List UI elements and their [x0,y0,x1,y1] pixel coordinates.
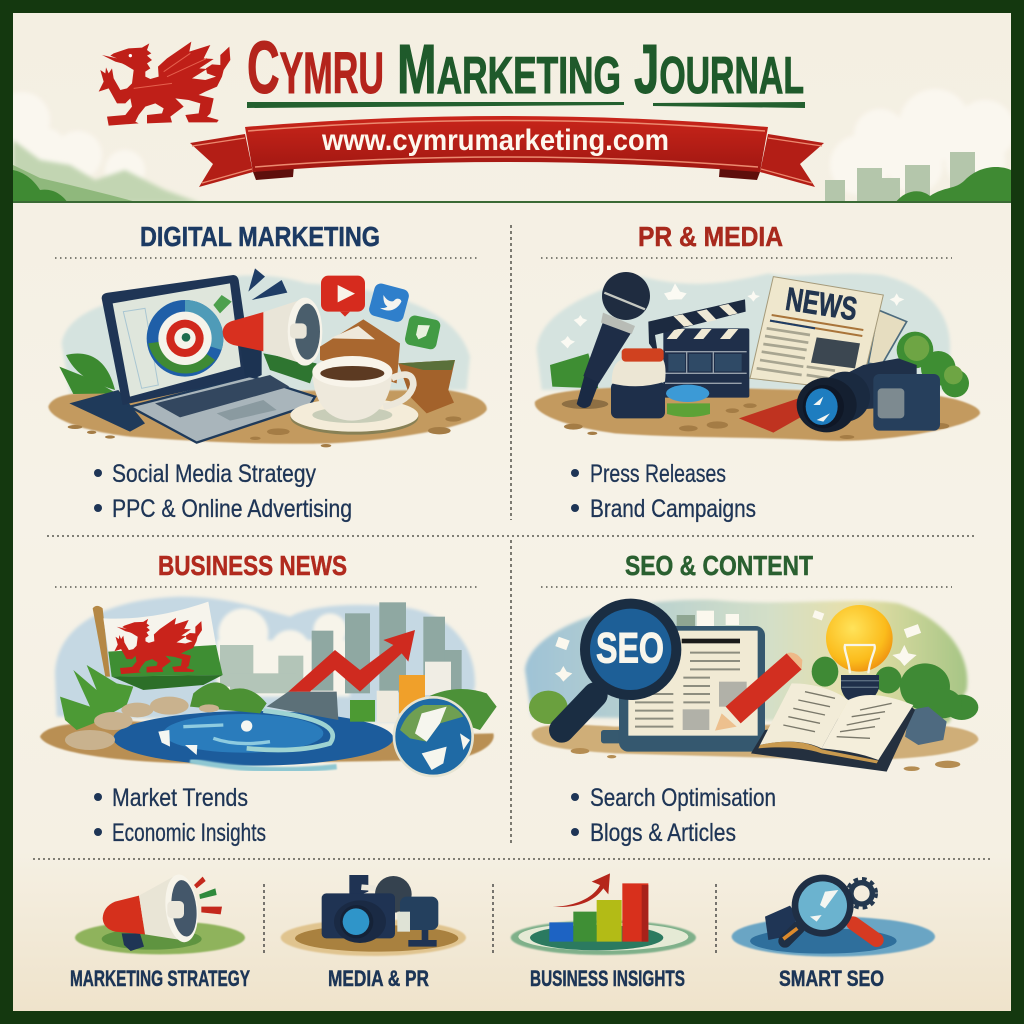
list: Economic Insights [112,819,266,847]
label: MARKETING STRATEGY [70,966,250,991]
newspaper: NEWS [783,280,860,327]
bottom strip [70,873,935,991]
list [571,784,776,847]
list: PPC & Online Advertising [112,495,352,523]
icon: chat [404,314,441,350]
newspaper [750,277,907,390]
ribbon banner [190,116,824,187]
megaphone [223,298,322,366]
header band [0,89,1015,203]
clapperboard [648,299,749,398]
badge: marketing strategy [70,873,250,991]
ribbon url: www.cymrumarketing.com [321,124,669,157]
list: Brand Campaigns [590,495,756,523]
plants and stones [60,665,267,750]
icon: megaphone [75,873,245,954]
badge: business insights [511,873,696,991]
title: MARKETING [397,30,621,108]
heading: SEO & CONTENT [625,550,813,581]
illustration: Welsh flag, river, skyline, growth arrow, globe [40,597,497,776]
badge: smart seo [732,875,935,991]
jars [611,348,710,418]
coffee sack and book [320,319,455,413]
header rule [13,201,1011,203]
title: JOURNAL [634,30,804,108]
heading: PR & MEDIA [638,221,783,252]
target [147,300,223,377]
magnifier [562,599,681,730]
magnifier: SEO [596,625,664,673]
document tablet [601,626,765,752]
open book [751,683,915,772]
logo: red Welsh dragon [99,42,230,126]
illustration: laptop, megaphone and coffee [48,268,487,447]
panel: pr and media [535,221,980,523]
panel: digital marketing [48,221,487,523]
title underline [247,102,805,108]
label: BUSINESS INSIGHTS [530,966,685,991]
icon: bird [368,282,410,323]
label: SMART SEO [779,966,884,991]
microphone [562,272,650,409]
list: Press Releases [590,460,726,488]
camera [797,358,940,432]
badge: media and pr [281,875,466,991]
scenery: clouds and hills left [13,93,197,201]
illustration: microphone, clapper, newspaper, camera [535,272,980,441]
title [247,26,804,109]
icon: bar chart [511,873,696,955]
label: MEDIA & PR [328,966,429,991]
globe [394,697,473,776]
light bulb [826,605,893,703]
flag [93,602,223,690]
list [571,460,756,523]
illustration: magnifier, document, pencil, bulb, book [525,599,978,772]
dividers [33,225,990,859]
list [94,460,352,523]
list: Blogs & Articles [590,819,736,847]
pencil [715,652,802,731]
list: Search Optimisation [590,784,776,812]
icon: camera [281,875,466,956]
icon: magnifier and gear [732,875,935,957]
heading: BUSINESS NEWS [158,550,347,581]
title: CYMRU [247,26,384,109]
growth arrow and bars [267,630,497,730]
coffee cup [290,356,418,435]
list: Market Trends [112,784,248,812]
river [113,711,393,770]
stars [555,610,921,682]
panel: seo and content [525,550,978,847]
list [94,784,266,847]
red wedge [739,398,802,433]
panel: business news [40,550,497,847]
scenery: clouds and skyline right [825,89,1015,203]
icon: video [321,276,365,317]
heading: DIGITAL MARKETING [140,221,380,252]
strip separators [264,884,716,953]
list: Social Media Strategy [112,460,316,488]
